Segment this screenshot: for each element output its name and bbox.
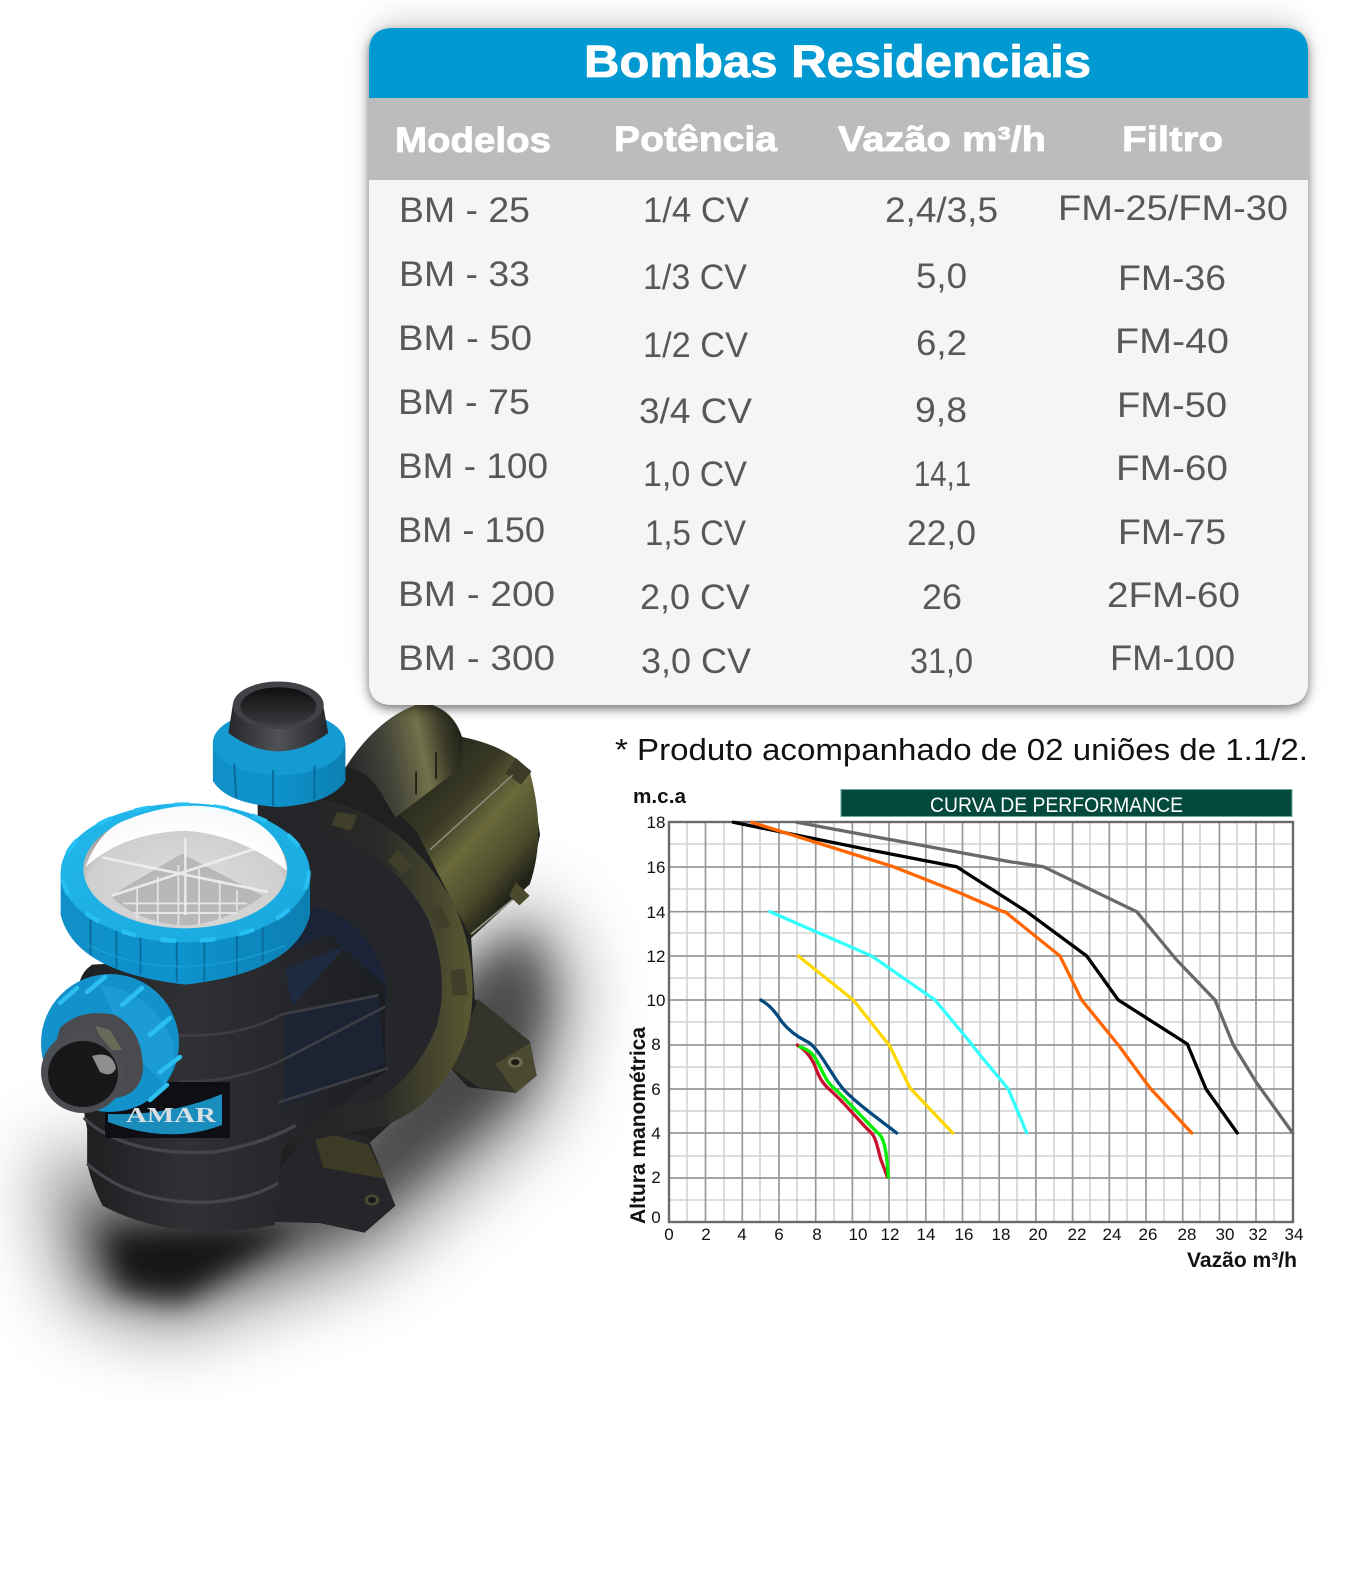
x axis numbers: 20: [1029, 1225, 1047, 1244]
x axis title: Vazão m³/h: [1187, 1249, 1297, 1272]
column: modelos: BM - 75: [398, 383, 530, 422]
curve: orange: [752, 822, 1192, 1133]
column: potencia: 1,5 CV: [645, 514, 747, 553]
product illustration: pool pump: [41, 681, 540, 1233]
column: modelos: BM - 25: [399, 191, 530, 230]
x axis numbers: 22: [1068, 1225, 1086, 1244]
x axis numbers: 4: [737, 1225, 747, 1244]
capacitor cover: [345, 703, 463, 817]
x axis numbers: 32: [1249, 1225, 1267, 1244]
y axis numbers: 0: [651, 1208, 661, 1227]
y axis numbers: 12: [647, 947, 665, 966]
bottom mounting foot: [240, 1125, 395, 1233]
column: modelos: BM - 150: [398, 511, 545, 550]
curves: [733, 822, 1293, 1177]
y axis numbers: 10: [647, 991, 665, 1010]
column: filtro: FM-75: [1118, 513, 1226, 552]
plot frame: [669, 822, 1293, 1222]
column: potencia: 1/3 CV: [643, 258, 748, 297]
outlet neck: [258, 792, 323, 865]
column: vazao: 5,0: [916, 257, 967, 296]
y axis numbers: 8: [651, 1035, 661, 1054]
table header row: Modelos: [395, 121, 551, 160]
x axis numbers: 14: [917, 1225, 935, 1244]
table body: [369, 170, 1308, 705]
x axis numbers: 6: [774, 1225, 784, 1244]
table header row: Vazão m³/h: [838, 120, 1046, 159]
x axis numbers: 24: [1103, 1225, 1121, 1244]
column: filtro: FM-60: [1116, 449, 1228, 488]
column: vazao: 31,0: [910, 642, 973, 681]
column: vazao: [885, 191, 998, 681]
x axis numbers: 12: [881, 1225, 899, 1244]
column: vazao: 14,1: [914, 455, 971, 494]
y axis numbers: 14: [647, 903, 665, 922]
y axis numbers: 4: [651, 1124, 661, 1143]
footnote: * Produto acompanhado de 02 uniões de 1.1/2.: [615, 732, 1308, 767]
title bar: [369, 28, 1308, 98]
column: filtro: FM-50: [1117, 386, 1227, 425]
strainer lid ring: [61, 803, 310, 985]
x axis numbers: 10: [849, 1225, 867, 1244]
column: vazao: 9,8: [915, 391, 967, 430]
x axis numbers: 2: [701, 1225, 711, 1244]
table header row: Filtro: [1122, 120, 1223, 159]
table header row: Potência: [614, 120, 778, 159]
curve: gray: [797, 822, 1293, 1133]
curve: yellow: [798, 956, 953, 1133]
column: vazao: 26: [922, 578, 962, 617]
column: filtro: FM-25/FM-30: [1058, 189, 1288, 228]
y axis numbers: 18: [647, 813, 665, 832]
brand label: AMAR: [126, 1103, 217, 1127]
volute ring: [247, 798, 473, 1145]
y axis numbers: 16: [647, 858, 665, 877]
column: potencia: 1,0 CV: [643, 455, 748, 494]
panel: model table: [369, 28, 1308, 705]
curve: green: [800, 1047, 888, 1177]
column: filtro: 2FM-60: [1107, 576, 1240, 615]
x axis numbers: 0: [664, 1225, 674, 1244]
motor housing: [385, 737, 538, 938]
column: vazao: 2,4/3,5: [885, 191, 998, 230]
column: potencia: [639, 191, 753, 681]
x axis numbers: 16: [955, 1225, 973, 1244]
column: filtro: FM-36: [1118, 259, 1226, 298]
minor grid: [669, 822, 1293, 1222]
table header row: [369, 98, 1308, 180]
column: modelos: [398, 191, 555, 678]
top outlet union: [213, 681, 345, 807]
column: filtro: FM-40: [1115, 322, 1229, 361]
y axis numbers: [647, 813, 665, 1227]
x axis numbers: 28: [1178, 1225, 1196, 1244]
column: potencia: 1/4 CV: [643, 191, 750, 230]
column: vazao: 22,0: [907, 514, 976, 553]
x axis numbers: 8: [812, 1225, 822, 1244]
left inlet union: [41, 974, 180, 1113]
y axis numbers: 2: [651, 1168, 661, 1187]
x axis numbers: 18: [992, 1225, 1010, 1244]
curve: red: [797, 1045, 887, 1177]
column: modelos: BM - 200: [398, 575, 555, 614]
curve: cyan: [770, 912, 1027, 1133]
major grid: [669, 822, 1293, 1222]
column: modelos: BM - 50: [398, 319, 532, 358]
column: vazao: 6,2: [916, 324, 967, 363]
x axis numbers: [664, 1225, 1303, 1244]
brand label: [105, 1082, 230, 1138]
table halo: [372, 18, 1304, 698]
curve: black: [733, 822, 1237, 1133]
pump drop shadow: [40, 900, 575, 1330]
x axis numbers: 34: [1285, 1225, 1303, 1244]
curve: navy: [761, 1000, 897, 1133]
column: potencia: 1/2 CV: [643, 326, 749, 365]
column: modelos: BM - 33: [399, 255, 530, 294]
y axis unit: m.c.a: [633, 786, 687, 808]
column: filtro: FM-100: [1110, 639, 1235, 678]
chart banner: [841, 790, 1292, 817]
column: filtro: [1058, 189, 1288, 678]
title bar: Bombas Residenciais: [584, 36, 1091, 87]
strainer pot body: [79, 934, 389, 1231]
y axis numbers: 6: [651, 1080, 661, 1099]
column: modelos: BM - 100: [398, 447, 548, 486]
performance chart: [627, 786, 1303, 1272]
pump silhouette backing: [240, 703, 540, 1233]
column: potencia: 3/4 CV: [639, 392, 753, 431]
column: potencia: 2,0 CV: [640, 578, 751, 617]
x axis numbers: 30: [1216, 1225, 1234, 1244]
column: potencia: 3,0 CV: [641, 642, 752, 681]
clear strainer lid: [83, 806, 287, 928]
right mounting foot: [451, 999, 537, 1093]
column: modelos: BM - 300: [398, 639, 555, 678]
y axis title: Altura manométrica: [627, 1027, 650, 1224]
x axis numbers: 26: [1139, 1225, 1157, 1244]
chart banner: CURVA DE PERFORMANCE: [930, 794, 1183, 817]
